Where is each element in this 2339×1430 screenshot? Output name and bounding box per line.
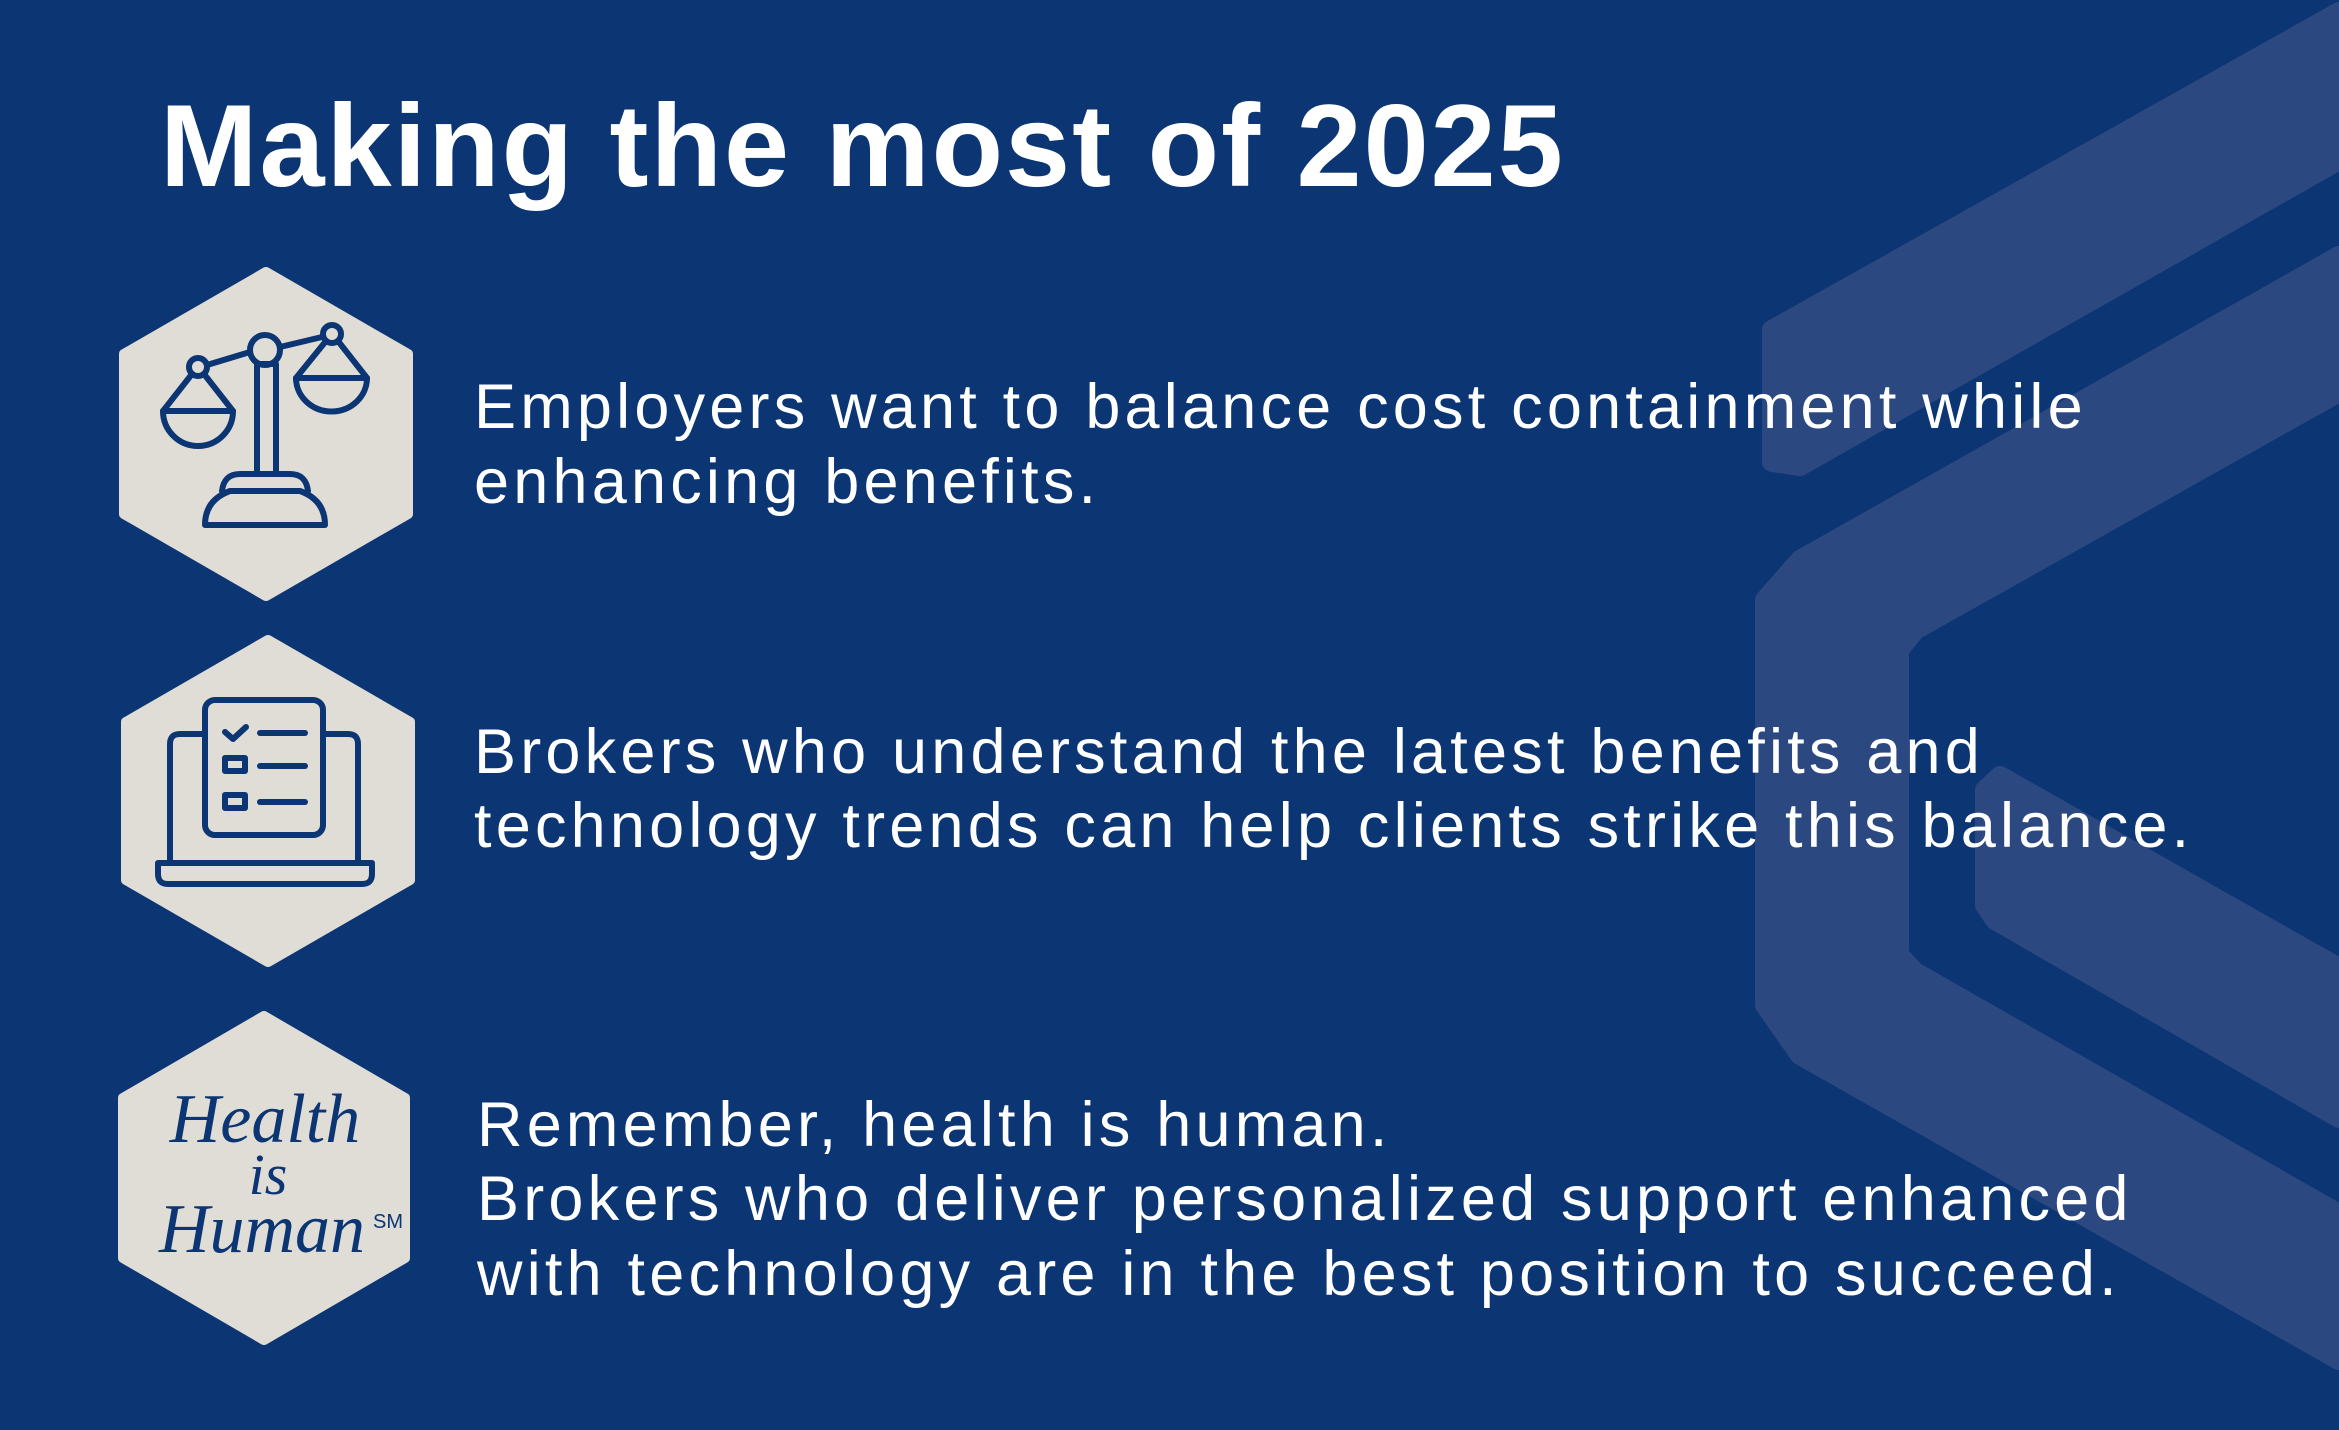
text block 3: Brokers who deliver personalized support enhanced xyxy=(477,1164,2133,1234)
text block 3 xyxy=(476,1090,2133,1309)
hexagon 3: Health is Human logo xyxy=(123,1016,405,1340)
hexagon 1: scales icon xyxy=(124,272,408,596)
logo text: Human xyxy=(158,1191,365,1268)
icon: balance scales xyxy=(163,325,367,525)
title: Making the most of 2025 xyxy=(160,80,1565,211)
text block 1: enhancing benefits. xyxy=(474,447,1100,517)
text block 2: Brokers who understand the latest benefits and xyxy=(474,717,1984,787)
text block 2: technology trends can help clients strike this balance. xyxy=(474,791,2193,861)
logo text: is xyxy=(249,1142,287,1207)
text block 1 xyxy=(474,372,2087,517)
decorative chevron bands xyxy=(1765,12,2339,1360)
text block 3: with technology are in the best position to succeed. xyxy=(476,1239,2121,1309)
logo text xyxy=(158,1081,403,1268)
logo text: SM xyxy=(373,1211,403,1233)
icon: laptop checklist xyxy=(158,700,372,884)
text block 2 xyxy=(474,717,2193,861)
text block 3: Remember, health is human. xyxy=(477,1090,1392,1160)
logo text: Health xyxy=(169,1081,360,1158)
hexagon 2: laptop checklist icon xyxy=(126,640,410,962)
text block 1: Employers want to balance cost containment while xyxy=(474,372,2087,442)
